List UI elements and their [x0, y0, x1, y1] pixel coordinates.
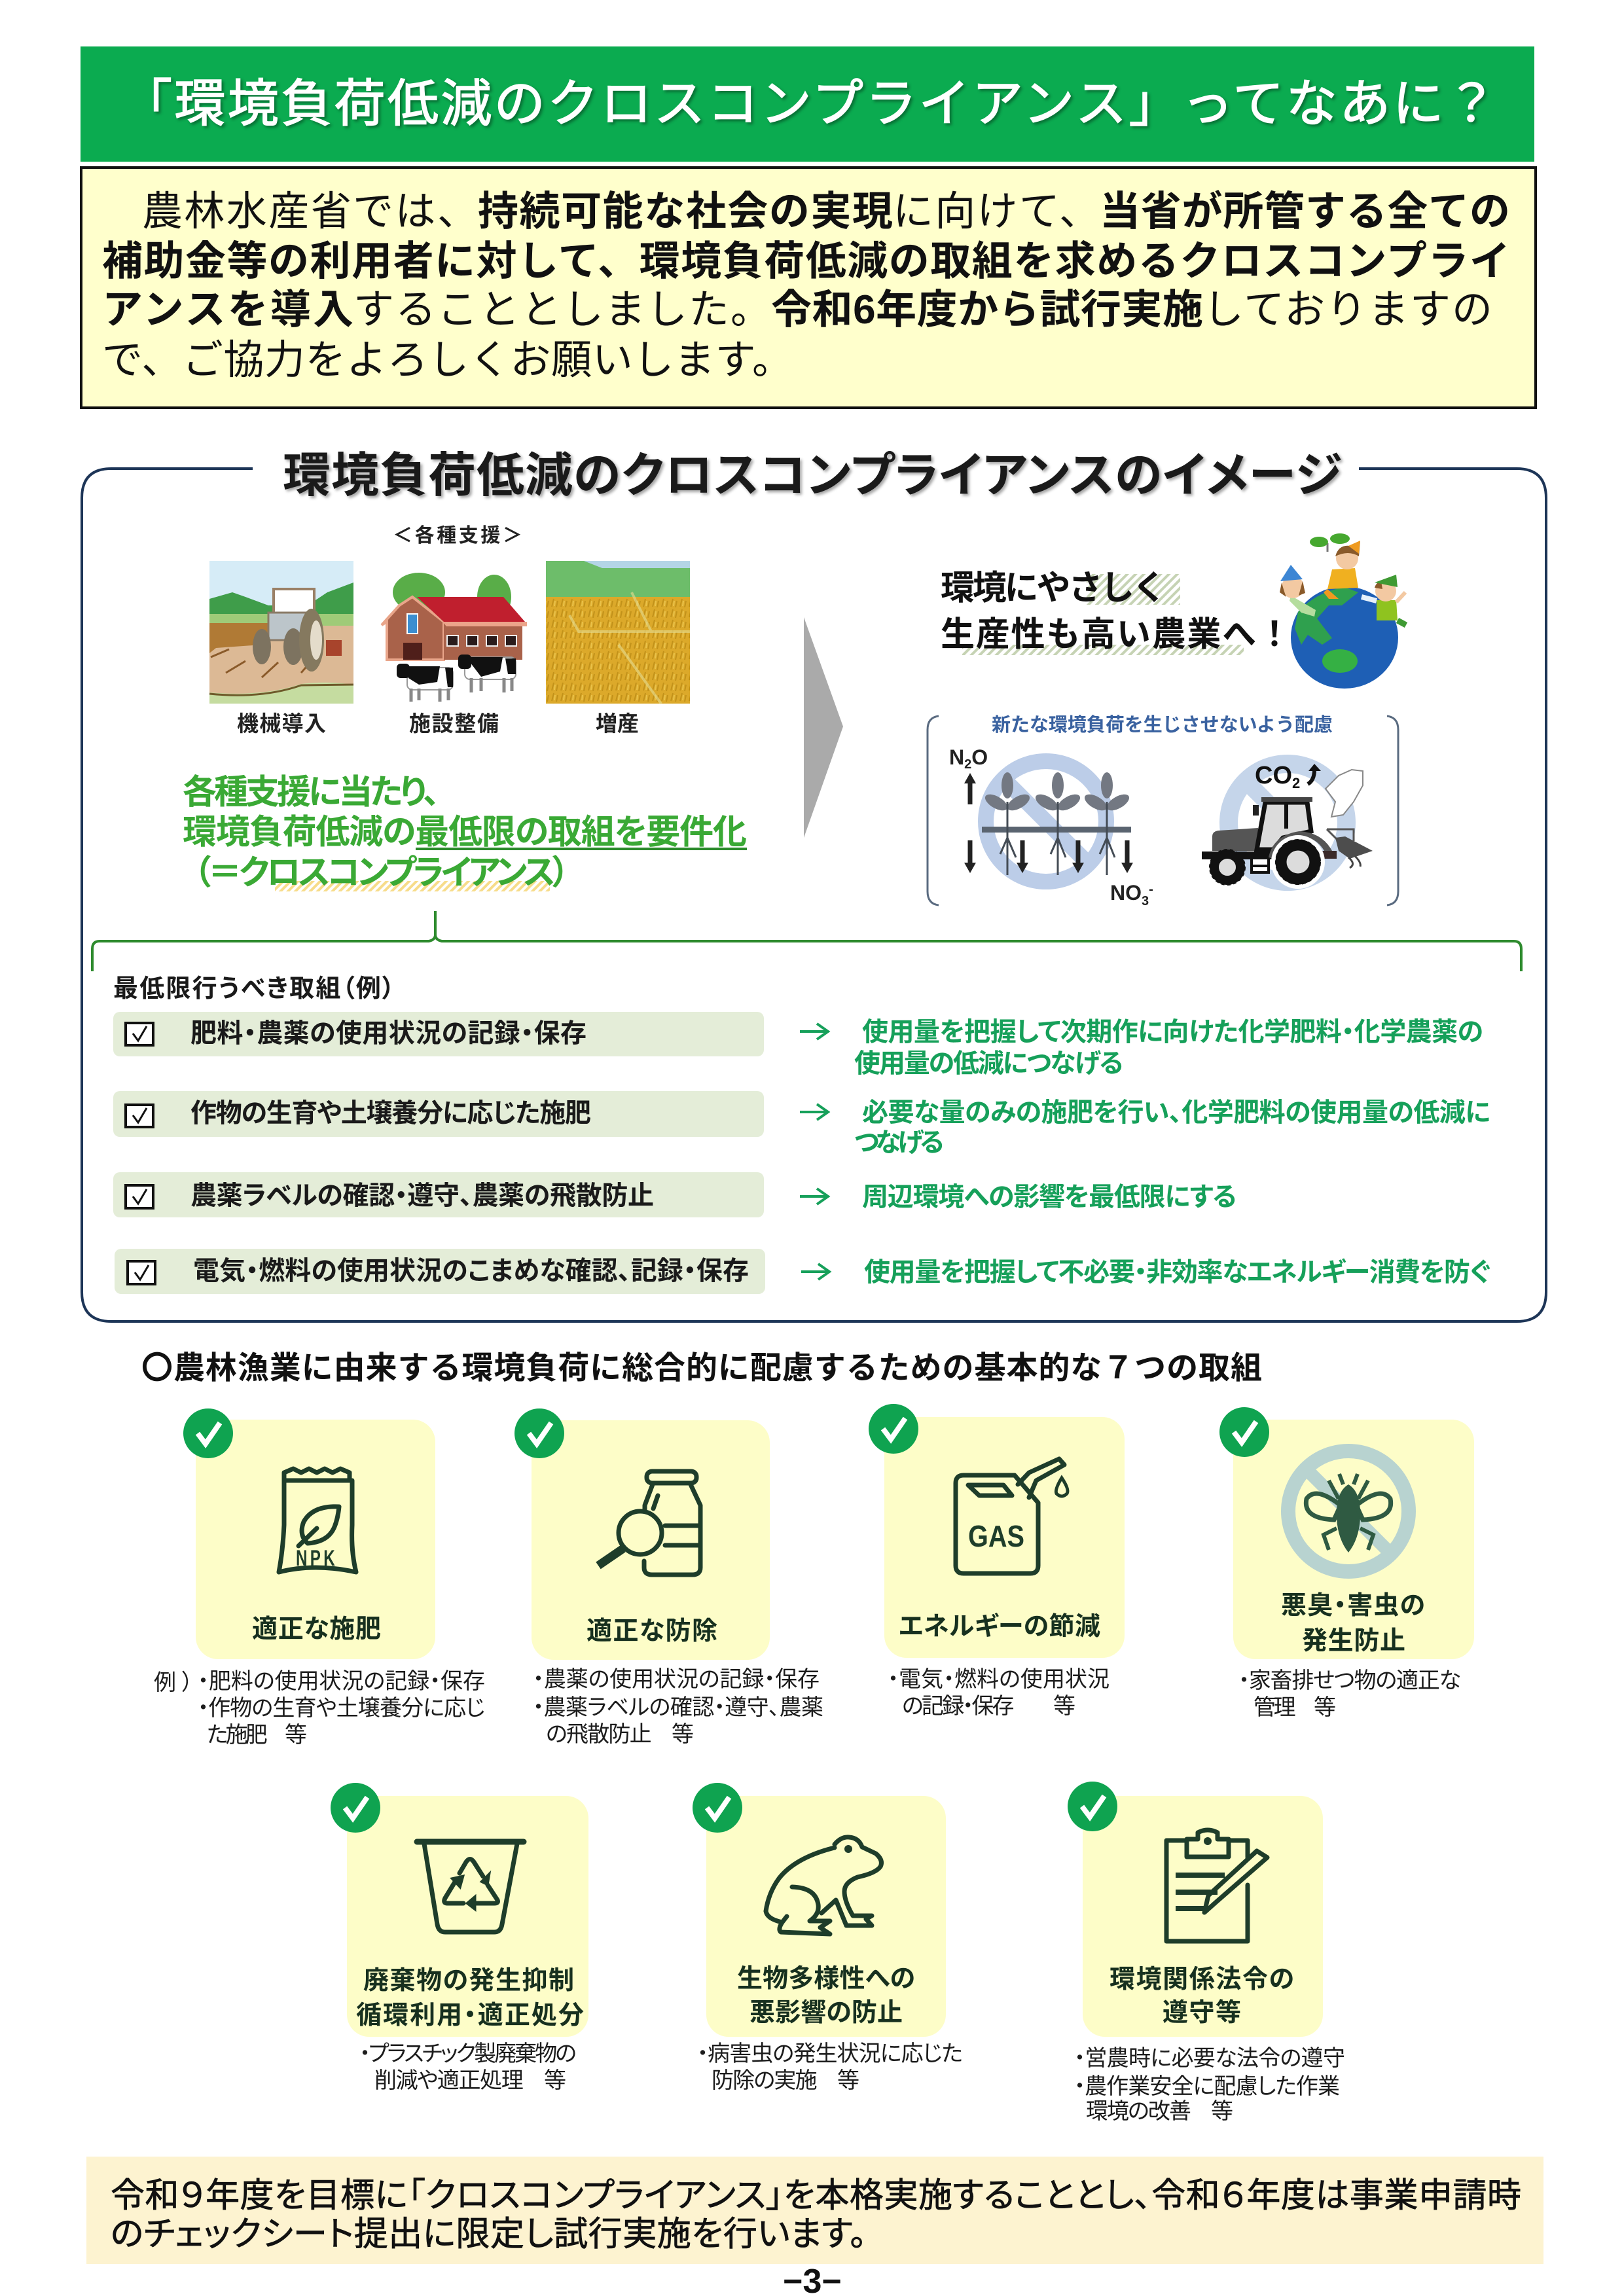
row 3 effect: 周辺環境への影響を最低限にする	[862, 1183, 1236, 1211]
card title: 環境関係法令の	[1110, 1965, 1294, 1994]
labels under illustrations: 施設整備	[409, 711, 499, 736]
card 2: proper pest control	[514, 1408, 770, 1660]
badge: check	[514, 1408, 564, 1458]
card title: 発生防止	[1302, 1627, 1405, 1655]
green bracket	[92, 911, 1521, 971]
row 1 effect: 使用量を把握して次期作に向けた化学肥料・化学農薬の	[862, 1018, 1483, 1047]
badge: check	[693, 1783, 742, 1833]
diagram: tractor with CO2 prohibited	[1202, 762, 1373, 884]
labels under illustrations	[237, 711, 639, 736]
row 3 checklist	[113, 1172, 764, 1217]
notes for card 1	[154, 1669, 485, 1748]
subheading: minimum actions: 最低限行うべき取組（例）	[113, 975, 395, 1003]
notes for card 6	[697, 2041, 963, 2093]
badge: check	[1068, 1782, 1117, 1831]
green statement: minimum requirement: （＝クロスコンプライアンス）	[194, 854, 569, 892]
intro text box: に向けて、	[893, 189, 1100, 234]
title banner	[81, 46, 1534, 162]
notes for card 7: ・農作業安全に配慮した作業	[1074, 2074, 1340, 2099]
card title: 適正な防除	[586, 1617, 717, 1645]
card title: 廃棄物の発生抑制	[363, 1967, 574, 1995]
row 2 effect: つなげる	[854, 1128, 944, 1157]
row 4 effect: 使用量を把握して不必要・非効率なエネルギー消費を防ぐ	[864, 1258, 1490, 1287]
diagram: crops with N2O and NO3 prohibited: 3	[1142, 894, 1149, 908]
card 4: odor and pest prevention	[1219, 1407, 1474, 1659]
row 2 effect	[800, 1098, 1490, 1157]
title banner: 「環境負荷低減のクロスコンプライアンス」ってなあに？	[121, 75, 1497, 132]
notes for card 1: 例）	[154, 1670, 193, 1695]
slogan: eco-friendly and productive agriculture	[941, 569, 1291, 655]
notes for card 2	[533, 1667, 823, 1747]
notes for card 1: た施肥 等	[207, 1723, 307, 1748]
row 4 checklist: 電気・燃料の使用状況のこまめな確認、記録・保存	[193, 1257, 749, 1285]
diagram: crops with N2O and NO3 prohibited: NO	[1110, 881, 1142, 905]
icon: gas can: GAS	[968, 1519, 1024, 1553]
notes for card 2: の飛散防止 等	[546, 1722, 694, 1747]
notes for card 5: 削減や適正処理 等	[374, 2068, 566, 2093]
icon: gas can	[956, 1459, 1068, 1573]
card title: 生物多様性への	[737, 1965, 915, 1993]
notes for card 3	[888, 1667, 1110, 1719]
icon: bottle and magnifier	[598, 1471, 700, 1575]
diagram: tractor with CO2 prohibited: 2	[1292, 775, 1300, 791]
green statement: minimum requirement: 環境負荷低減の最低限の取組を要件化	[183, 814, 747, 852]
panel: cross compliance image	[82, 449, 1546, 1321]
notes for card 3: ・電気・燃料の使用状況	[888, 1667, 1110, 1692]
card title: 悪影響の防止	[749, 1999, 903, 2027]
badge: check	[869, 1404, 918, 1454]
intro text box: 当省が所管する全ての	[1100, 189, 1510, 234]
card title: 遵守等	[1163, 1999, 1241, 2027]
diagram: crops with N2O and NO3 prohibited: -	[1149, 882, 1153, 897]
row 2 effect: 必要な量のみの施肥を行い、化学肥料の使用量の低減に	[862, 1098, 1490, 1127]
card title: エネルギーの節減	[899, 1613, 1100, 1641]
intro text box: 補助金等の利用者に対して、環境負荷低減の取組を求めるクロスコンプライ	[102, 239, 1510, 284]
slogan: eco-friendly and productive agriculture: 生産性も高い農業へ！	[941, 616, 1291, 654]
intro text box: 持続可能な社会の実現	[478, 189, 893, 234]
section heading: seven basic actions: 〇農林漁業に由来する環境負荷に総合的に配慮するための基本的な７つの取組	[141, 1351, 1262, 1386]
notes for card 5: ・プラスチック製廃棄物の	[359, 2041, 577, 2066]
row 4 checklist	[115, 1249, 765, 1294]
card 5: waste reduction	[331, 1783, 588, 2037]
notes for card 4: ・家畜排せつ物の適正な	[1238, 1668, 1461, 1693]
card title: 循環利用・適正処分	[356, 2001, 584, 2030]
row 1 checklist: 肥料・農薬の使用状況の記録・保存	[190, 1019, 586, 1048]
label: various support: ＜各種支援＞	[393, 525, 522, 547]
notes for card 1: ・作物の生育や土壌養分に応じ	[198, 1696, 485, 1721]
diagram: crops with N2O and NO3 prohibited: 2	[964, 757, 971, 772]
card title: 適正な施肥	[252, 1615, 381, 1643]
card title: 悪臭・害虫の	[1281, 1592, 1425, 1620]
notes for card 3: の記録・保存 等	[902, 1694, 1075, 1719]
notes for card 5	[359, 2041, 577, 2093]
icon: recycling bin	[417, 1842, 524, 1932]
notes for card 7	[1074, 2046, 1345, 2124]
notes for card 6: 防除の実施 等	[712, 2068, 859, 2093]
diagram: crops with N2O and NO3 prohibited: O	[971, 745, 988, 769]
icon: globe with children	[1280, 533, 1406, 689]
intro text box: で、ご協力をよろしくお願いします。	[102, 338, 793, 383]
diagram: crops with N2O and NO3 prohibited: N	[949, 745, 964, 769]
icon: frog	[766, 1837, 881, 1934]
labels under illustrations: 機械導入	[237, 711, 326, 736]
notes for card 2: ・農薬ラベルの確認・遵守、農薬	[533, 1695, 823, 1720]
bracket frame: no new environmental burden	[928, 714, 1398, 905]
notes for card 4: 管理 等	[1254, 1695, 1336, 1720]
card title	[1110, 1965, 1294, 2027]
card 7: legal compliance	[1068, 1782, 1323, 2037]
slogan: eco-friendly and productive agriculture: 環境にやさしく	[941, 569, 1166, 607]
card title	[1281, 1592, 1425, 1655]
arrow: grey chevron	[804, 617, 843, 838]
intro text box: アンスを導入	[102, 287, 353, 332]
illustration: barn and cows	[382, 573, 527, 702]
bottom note: のチェックシート提出に限定し試行実施を行います。	[111, 2215, 867, 2253]
bottom note: 令和９年度を目標に「クロスコンプライアンス」を本格実施することとし、令和６年度は事業申請時	[111, 2177, 1521, 2215]
bottom note	[86, 2157, 1543, 2264]
row 1 checklist	[113, 1012, 764, 1056]
panel heading: 環境負荷低減のクロスコンプライアンスのイメージ	[283, 449, 1342, 502]
row 1 effect: 使用量の低減につなげる	[854, 1049, 1123, 1078]
illustration: golden rice field	[546, 561, 690, 704]
bracket frame: no new environmental burden: 新たな環境負荷を生じさせないよう配慮	[992, 714, 1333, 736]
labels under illustrations: 増産	[596, 711, 639, 736]
notes for card 2: ・農薬の使用状況の記録・保存	[533, 1667, 820, 1692]
diagram: crops with N2O and NO3 prohibited	[949, 745, 1153, 908]
icon: fertilizer bag: NPK	[296, 1546, 338, 1571]
row 1 effect	[800, 1018, 1483, 1078]
notes for card 6: ・病害虫の発生状況に応じた	[697, 2041, 963, 2066]
icon: clipboard and pencil	[1166, 1830, 1267, 1941]
intro text box: 令和6年度から試行実施	[771, 287, 1203, 332]
notes for card 7: 環境の改善 等	[1086, 2099, 1233, 2124]
card title	[737, 1965, 915, 2027]
notes for card 7: ・営農時に必要な法令の遵守	[1074, 2046, 1345, 2071]
illustration: tractor in field	[209, 561, 353, 704]
intro text box: することとしました。	[353, 287, 771, 332]
badge: check	[1219, 1407, 1269, 1457]
badge: check	[183, 1408, 233, 1458]
icon: insect prohibited	[1288, 1451, 1409, 1571]
card 1: proper fertilization	[183, 1408, 435, 1659]
row 3 checklist: 農薬ラベルの確認・遵守、農薬の飛散防止	[190, 1181, 654, 1210]
intro text box	[81, 168, 1536, 408]
notes for card 4	[1238, 1668, 1461, 1720]
card 3: energy saving	[869, 1404, 1125, 1658]
green statement: minimum requirement: 各種支援に当たり、	[183, 774, 440, 812]
row 2 checklist	[113, 1091, 764, 1137]
icon: fertilizer bag	[279, 1469, 356, 1572]
card 6: biodiversity	[693, 1783, 946, 2037]
intro text box: しておりますの	[1203, 287, 1492, 332]
badge: check	[331, 1783, 380, 1833]
intro text box: 農林水産省では、	[142, 189, 478, 234]
notes for card 1: ・肥料の使用状況の記録・保存	[198, 1669, 485, 1694]
green statement: minimum requirement	[183, 774, 747, 892]
diagram: tractor with CO2 prohibited: CO	[1255, 762, 1292, 789]
card title	[356, 1967, 584, 2030]
row 2 checklist: 作物の生育や土壌養分に応じた施肥	[190, 1099, 591, 1128]
